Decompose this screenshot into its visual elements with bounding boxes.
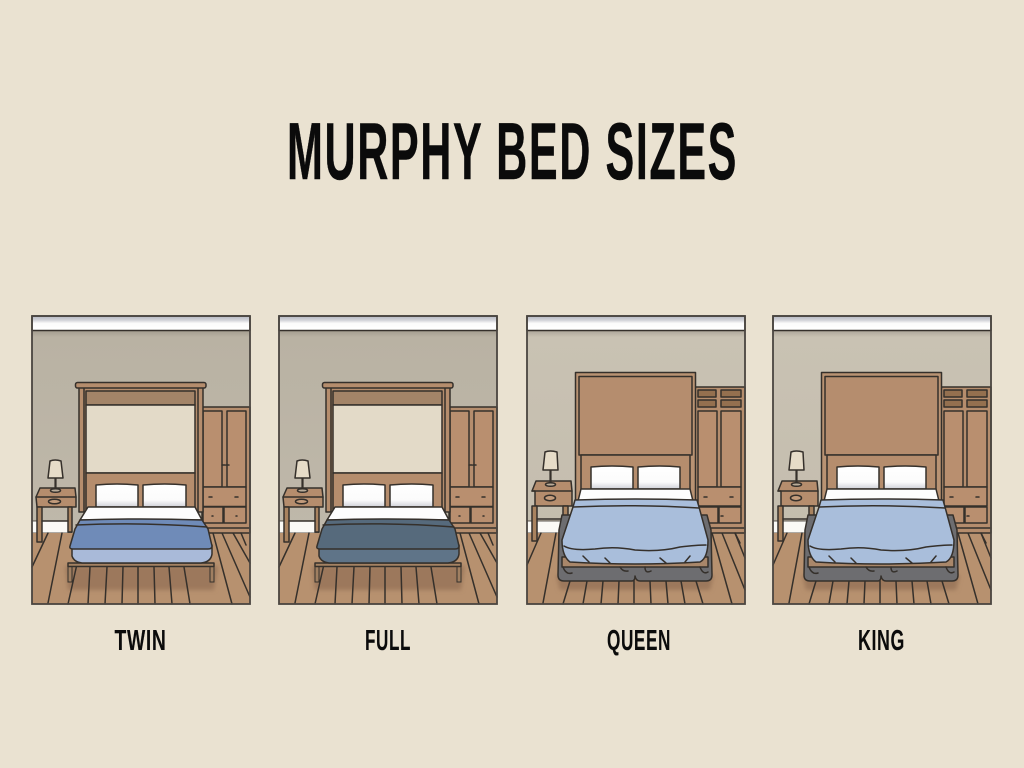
murphy cabinet [76,382,206,513]
bed: full [315,507,461,582]
nightstand [532,481,572,541]
pillows [96,484,186,507]
wall [773,330,991,534]
baseboard [773,521,813,533]
icon: lamp [543,451,558,486]
label: queen: QUEEN [607,625,671,657]
panel: queen [527,316,745,604]
baseboard [32,521,72,533]
wall [527,330,745,534]
floor [527,533,745,604]
wardrobe [202,407,250,545]
label: king: KING [858,625,905,657]
panel: twin [32,316,250,604]
baseboard [527,521,567,533]
bed: queen [558,489,712,581]
pillows [343,484,433,507]
pillows [837,466,926,489]
floor [279,533,497,604]
panel: full [279,316,497,604]
nightstand [778,481,818,541]
icon: lamp [789,451,804,486]
murphy cabinet [322,382,453,513]
floor [773,533,991,604]
wardrobe [941,387,991,543]
grey base [804,515,958,581]
murphy cabinet [822,372,942,512]
crown molding [279,316,497,330]
pillows [591,466,680,489]
crown molding [527,316,745,330]
bed: twin [68,507,214,582]
crown molding [773,316,991,330]
panel frames [32,316,991,604]
wardrobe [449,407,497,545]
crown molding [32,316,250,330]
panel: king [773,316,991,604]
nightstand [283,488,323,542]
grey base [558,515,712,581]
floor [32,533,250,604]
label: full: FULL [365,625,411,657]
bed: king [804,489,958,581]
wall [279,330,497,534]
icon: lamp [295,460,310,492]
nightstand [36,488,76,542]
wardrobe [695,387,745,543]
label: twin: TWIN [114,625,166,657]
murphy cabinet [576,372,696,512]
baseboard [279,521,319,533]
wall [32,330,250,534]
icon: lamp [48,460,63,492]
